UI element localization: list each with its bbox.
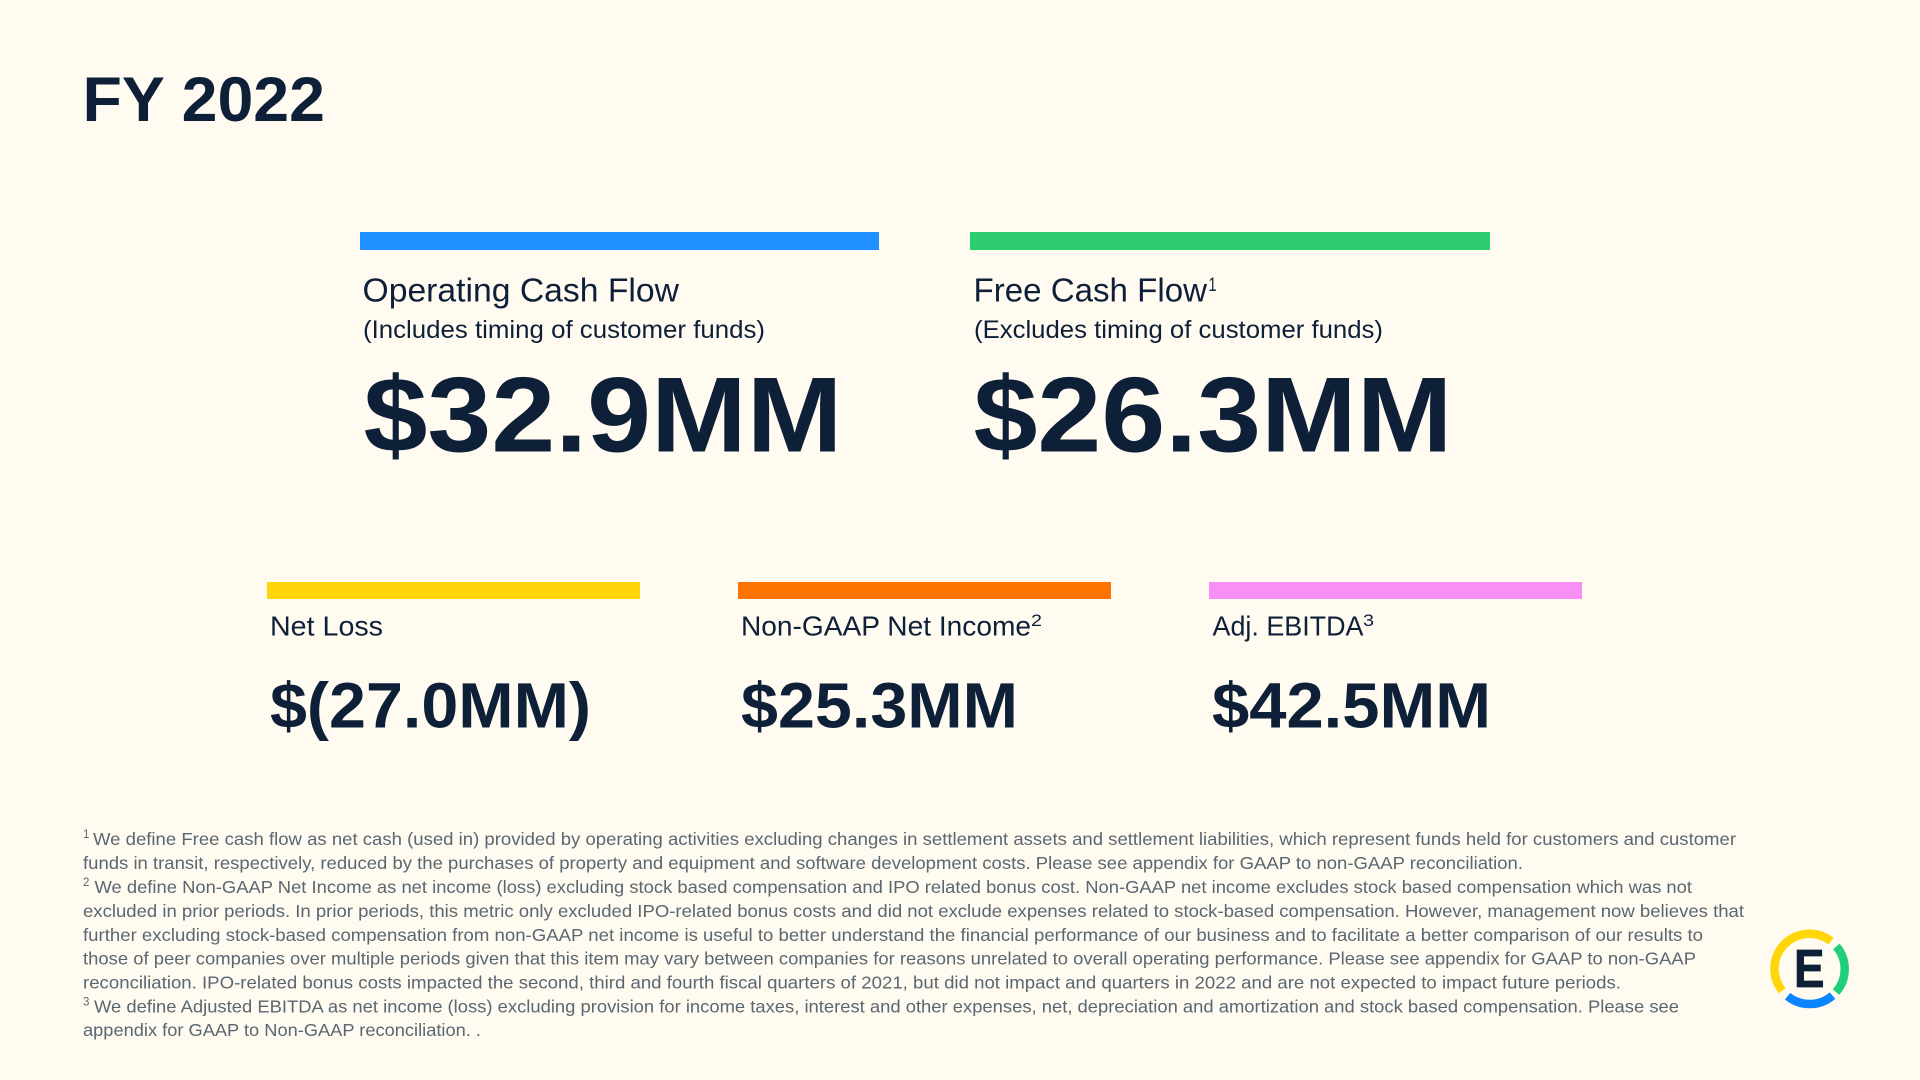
panel: net loss: $(27.0MM) (270, 670, 591, 742)
footnotes text block: excluded in prior periods. In prior periods, this metric only excluded IPO-related bonus costs and did not exclude expenses related to stock-based compensation. However, management now believes that (83, 901, 1744, 921)
footnotes text block: 3 (83, 996, 89, 1008)
panel: free cash flow: $26.3MM (974, 354, 1452, 474)
footnotes text block: those of peer companies over multiple periods given that this item may vary between companies for reasons unrelated to overall operating performance. Please see appendix for GAAP to non-GAAP (83, 948, 1696, 968)
panel: adj. EBITDA (1209, 582, 1582, 742)
title: FY 2022 (82, 65, 325, 135)
footnotes text block: 2 (83, 877, 89, 889)
panel: non-GAAP net income: $25.3MM (741, 670, 1018, 742)
panel: net loss: Net Loss (270, 610, 383, 642)
footnotes text block: reconciliation. IPO-related bonus costs impacted the second, third and fourth fiscal quarters of 2021, but did not impact and quarters in 2022 and are not expected to impact future periods. (83, 972, 1621, 992)
footnotes text block: appendix for GAAP to Non-GAAP reconciliation. . (83, 1020, 481, 1040)
footnotes text block: We define Non-GAAP Net Income as net income (loss) excluding stock based compensation and IPO related bonus cost. Non-GAAP net income excludes stock based compensation which was not (94, 877, 1692, 897)
panel: free cash flow: (Excludes timing of customer funds) (974, 316, 1383, 344)
panel: free cash flow: 1 (1208, 275, 1216, 296)
panel: operating cash flow: $32.9MM (364, 354, 842, 474)
panel: non-GAAP net income: 2 (1031, 611, 1042, 630)
footnotes text block: funds in transit, respectively, reduced by the purchases of property and equipment and software development costs. Please see appendix for GAAP to non-GAAP reconciliation. (83, 853, 1523, 873)
icon: company logo: E (1794, 939, 1824, 999)
footnotes text block: 1 (83, 829, 89, 841)
panel: free cash flow (970, 232, 1490, 474)
panel: adj. EBITDA: $42.5MM (1212, 670, 1491, 742)
panel: operating cash flow (360, 232, 879, 474)
footnotes text block: We define Free cash flow as net cash (used in) provided by operating activities excluding changes in settlement assets and settlement liabilities, which represent funds held for customers and customer (93, 829, 1736, 849)
panel: net loss (267, 582, 640, 742)
footnotes text block: We define Adjusted EBITDA as net income (loss) excluding provision for income taxes, interest and other expenses, net, depreciation and amortization and stock based compensation. Please see (94, 996, 1679, 1016)
panel: non-GAAP net income (738, 582, 1111, 742)
panel: non-GAAP net income: Non-GAAP Net Income (741, 610, 1031, 642)
footnotes text block: further excluding stock-based compensation from non-GAAP net income is useful to better understand the financial performance of our business and to facilitate a better comparison of our results to (83, 925, 1703, 945)
footnotes text block (83, 829, 1744, 1040)
panel: adj. EBITDA: Adj. EBITDA (1212, 610, 1364, 642)
panel: operating cash flow: Operating Cash Flow (362, 272, 679, 309)
panel: operating cash flow: (Includes timing of customer funds) (363, 316, 765, 344)
panel: free cash flow: Free Cash Flow (974, 272, 1207, 309)
panel: adj. EBITDA: 3 (1363, 611, 1374, 630)
icon: company logo (1774, 934, 1845, 1004)
